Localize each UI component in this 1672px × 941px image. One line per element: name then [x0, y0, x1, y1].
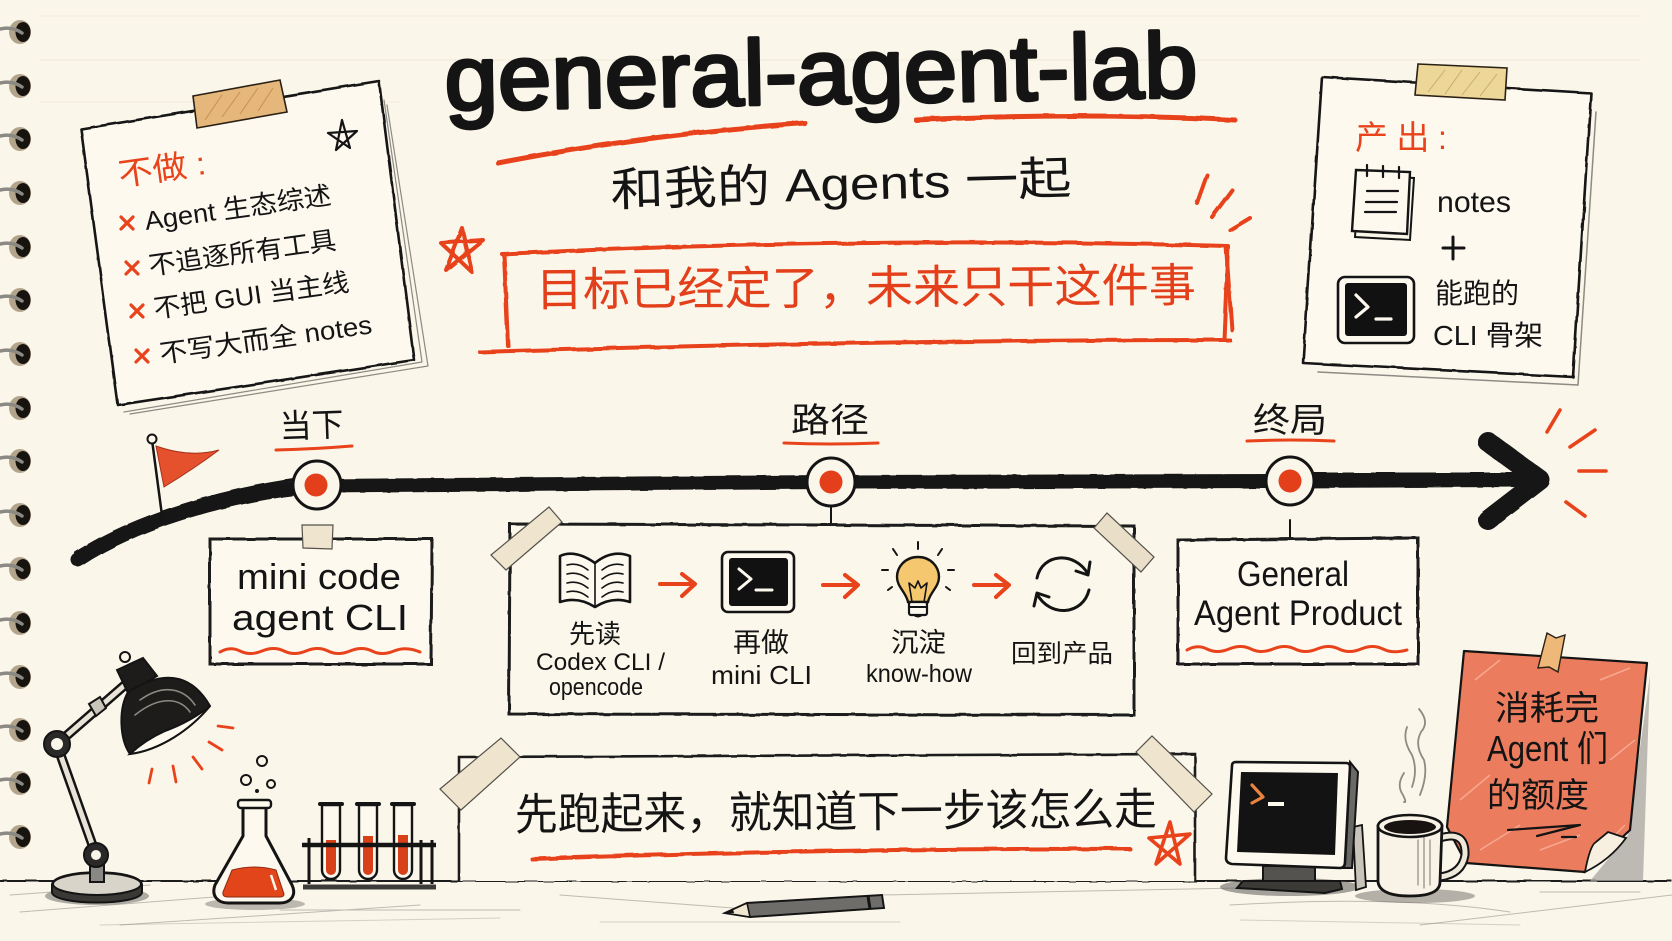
step 1 label: opencode — [549, 674, 643, 701]
bubbles — [241, 756, 275, 792]
step 2 label: 再做 — [733, 628, 789, 658]
note: not doing — [81, 80, 428, 414]
note list: 不写大而全 notes — [158, 309, 374, 369]
workflow frame — [509, 524, 1134, 715]
box tape — [302, 525, 333, 549]
stage node — [293, 461, 341, 509]
note shadow — [1590, 675, 1650, 881]
output note paper — [1303, 77, 1591, 377]
slogan tape right — [1136, 736, 1212, 812]
banner frame — [480, 242, 1232, 352]
box frame — [210, 539, 432, 664]
star and burst marks beside goal — [441, 175, 1250, 272]
note: outputs — [1303, 64, 1596, 385]
stage label: 路径 — [791, 402, 869, 440]
stage node — [807, 458, 855, 506]
desk line and sketch — [0, 881, 1672, 925]
arrow 2 — [823, 575, 858, 597]
connector — [1289, 520, 1291, 539]
timeline stage: now — [276, 406, 352, 509]
box text: General — [1237, 555, 1349, 594]
box: mini code agent CLI — [210, 525, 432, 664]
note hatching — [1460, 660, 1635, 850]
icon: terminal — [1338, 277, 1414, 343]
box: run first slogan — [440, 736, 1212, 881]
steam — [1400, 709, 1425, 802]
note text: 的额度 — [1487, 777, 1589, 815]
monitor screen — [1237, 772, 1338, 855]
sticky note: quota — [1447, 633, 1650, 881]
lamp joints — [84, 843, 108, 867]
banner text: 目标已经定了，未来只干这件事 — [536, 259, 1196, 316]
tube liquid — [326, 835, 408, 875]
note list: 不追逐所有工具 — [147, 225, 338, 281]
lamp arms — [57, 745, 96, 855]
note text — [1487, 690, 1608, 815]
stage label: 终局 — [1253, 402, 1327, 440]
note paper — [1447, 651, 1647, 872]
spiral binding rings — [0, 20, 31, 849]
title underlines — [498, 116, 1235, 163]
step 1 label — [536, 619, 665, 701]
arrow 3 — [974, 575, 1009, 597]
goal banner — [480, 242, 1232, 352]
output note shadow — [1318, 112, 1596, 385]
note list marks — [121, 217, 148, 362]
wavy underline — [220, 648, 420, 654]
box: path workflow — [491, 506, 1154, 715]
icon: open book — [560, 554, 630, 607]
box: General Agent Product: Agent Product — [1194, 594, 1402, 633]
subtitle: 和我的 Agents 一起 — [610, 152, 1072, 216]
icon: monitor — [1220, 762, 1366, 896]
lamp shade — [120, 652, 130, 662]
icon: coffee mug — [1355, 709, 1475, 903]
icon: flask — [205, 756, 305, 910]
mug body — [1378, 826, 1442, 896]
output note tape — [1415, 64, 1507, 100]
note text: Agent 们 — [1487, 728, 1608, 769]
lamp base — [45, 887, 149, 905]
output notes text: notes — [1437, 186, 1511, 219]
note list: 不把 GUI 当主线 — [152, 267, 351, 324]
step 3 label: know-how — [866, 660, 973, 688]
title: general-agent-lab — [444, 15, 1198, 130]
step 3 label — [866, 628, 973, 688]
box: mini code agent CLI: agent CLI — [232, 597, 408, 638]
note shadow pages — [124, 100, 428, 414]
note star — [328, 120, 357, 150]
monitor stand — [1263, 866, 1315, 881]
icon: light bulb — [882, 542, 954, 616]
icon: test tubes — [302, 804, 436, 887]
note: outputs: CLI 骨架 — [1433, 320, 1543, 351]
note list: Agent 生态综述 — [143, 180, 333, 236]
icon: flag — [148, 434, 219, 523]
rack — [302, 843, 436, 847]
note tape — [193, 80, 287, 128]
lamp light rays — [149, 726, 233, 783]
arrow 1 — [660, 574, 695, 596]
workflow tape right — [1094, 513, 1154, 572]
slogan frame — [459, 754, 1195, 881]
flask liquid — [223, 867, 284, 897]
step 2 label: mini CLI — [711, 660, 812, 690]
flask glass — [214, 807, 294, 903]
box: General Agent Product — [1178, 520, 1418, 664]
note text: 消耗完 — [1495, 690, 1599, 728]
stage node — [1266, 457, 1314, 505]
slogan text: 先跑起来，就知道下一步该怎么走 — [515, 785, 1157, 840]
timeline stage: path — [784, 402, 878, 506]
box text: mini code — [237, 556, 401, 597]
step 4 label: 回到产品 — [1011, 640, 1113, 668]
connector — [830, 506, 832, 523]
output CLI text: 能跑的 — [1435, 278, 1519, 309]
coffee shadow — [1355, 889, 1475, 903]
icon: terminal — [722, 552, 794, 612]
icon: pencil — [725, 895, 884, 917]
note scribble — [1508, 825, 1580, 837]
tube glass — [322, 805, 412, 879]
note list — [143, 180, 374, 369]
timeline stage: end — [1247, 402, 1334, 505]
box frame — [1178, 538, 1418, 664]
icon: cycle arrows — [1034, 558, 1090, 610]
timeline arrow — [76, 442, 1540, 560]
mug handle — [1440, 836, 1465, 877]
output heading: 产 出 : — [1355, 119, 1447, 156]
stage label: 当下 — [279, 406, 344, 445]
icon: desk lamp — [44, 652, 210, 905]
monitor body — [1340, 762, 1358, 868]
note heading: 不做 : — [116, 145, 208, 193]
step 2 label — [711, 628, 812, 690]
note paper — [81, 81, 414, 405]
step 3 label: 沉淀 — [891, 628, 946, 658]
arrow burst marks — [1547, 410, 1606, 516]
wavy underline — [1187, 646, 1407, 652]
workflow tape left — [491, 507, 562, 570]
icon: notepad — [1352, 165, 1414, 240]
note tape — [1538, 633, 1565, 672]
note curl — [1585, 832, 1626, 872]
step 1 label: Codex CLI / — [536, 649, 665, 676]
slogan tape left — [440, 738, 520, 810]
step 1 label: 先读 — [569, 619, 621, 649]
slogan underline — [532, 849, 1130, 859]
slogan star — [1149, 822, 1190, 864]
plus sign — [1443, 237, 1464, 259]
